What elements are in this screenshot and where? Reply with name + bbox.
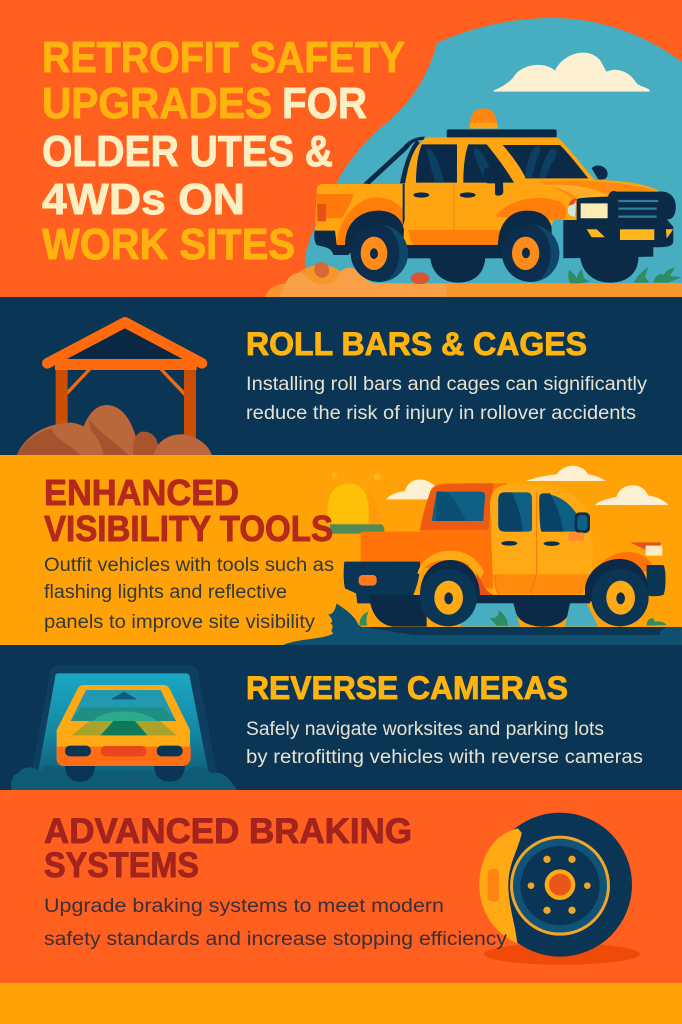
icon: brake disc	[479, 813, 640, 965]
description	[44, 896, 508, 950]
panel: roll bars and cages	[0, 297, 682, 455]
footer band	[0, 983, 682, 1024]
panel: enhanced visibility tools	[0, 455, 682, 650]
description: safety standards and increase stopping efficiency	[44, 929, 508, 950]
description: panels to improve site visibility	[44, 612, 316, 633]
description: Upgrade braking systems to meet modern	[44, 896, 444, 917]
icon: reverse camera view	[11, 665, 237, 790]
sky blob	[305, 18, 682, 297]
heading: ROLL BARS & CAGES	[246, 326, 587, 362]
description: Outfit vehicles with tools such as	[44, 555, 334, 576]
panel: advanced braking systems	[0, 790, 682, 983]
heading	[44, 472, 333, 549]
truck with beacon	[280, 466, 682, 650]
description	[246, 374, 648, 424]
title	[42, 33, 405, 269]
panel: header	[0, 0, 682, 297]
heading: ADVANCED BRAKING	[44, 812, 412, 851]
heading: VISIBILITY TOOLS	[44, 508, 333, 549]
heading	[44, 812, 412, 885]
description	[246, 719, 643, 768]
description: Safely navigate worksites and parking lots	[246, 719, 604, 740]
description	[44, 555, 334, 633]
heading: ENHANCED	[44, 472, 239, 513]
panel: reverse cameras	[0, 645, 682, 790]
description: by retrofitting vehicles with reverse cameras	[246, 747, 643, 768]
description: flashing lights and reflective	[44, 582, 287, 603]
title: 4WDs ON	[42, 175, 245, 224]
heading: SYSTEMS	[44, 846, 199, 885]
description: reduce the risk of injury in rollover accidents	[246, 403, 636, 424]
title: UPGRADES	[42, 79, 272, 128]
title: OLDER UTES &	[42, 127, 333, 176]
title: FOR	[282, 79, 367, 128]
description: Installing roll bars and cages can significantly	[246, 374, 648, 395]
title: WORK SITES	[42, 220, 295, 269]
title: RETROFIT SAFETY	[42, 33, 405, 82]
heading: REVERSE CAMERAS	[246, 670, 568, 706]
ground	[265, 265, 682, 297]
icon: roll cage shelter with rocks	[17, 322, 212, 455]
truck hero	[280, 53, 682, 297]
